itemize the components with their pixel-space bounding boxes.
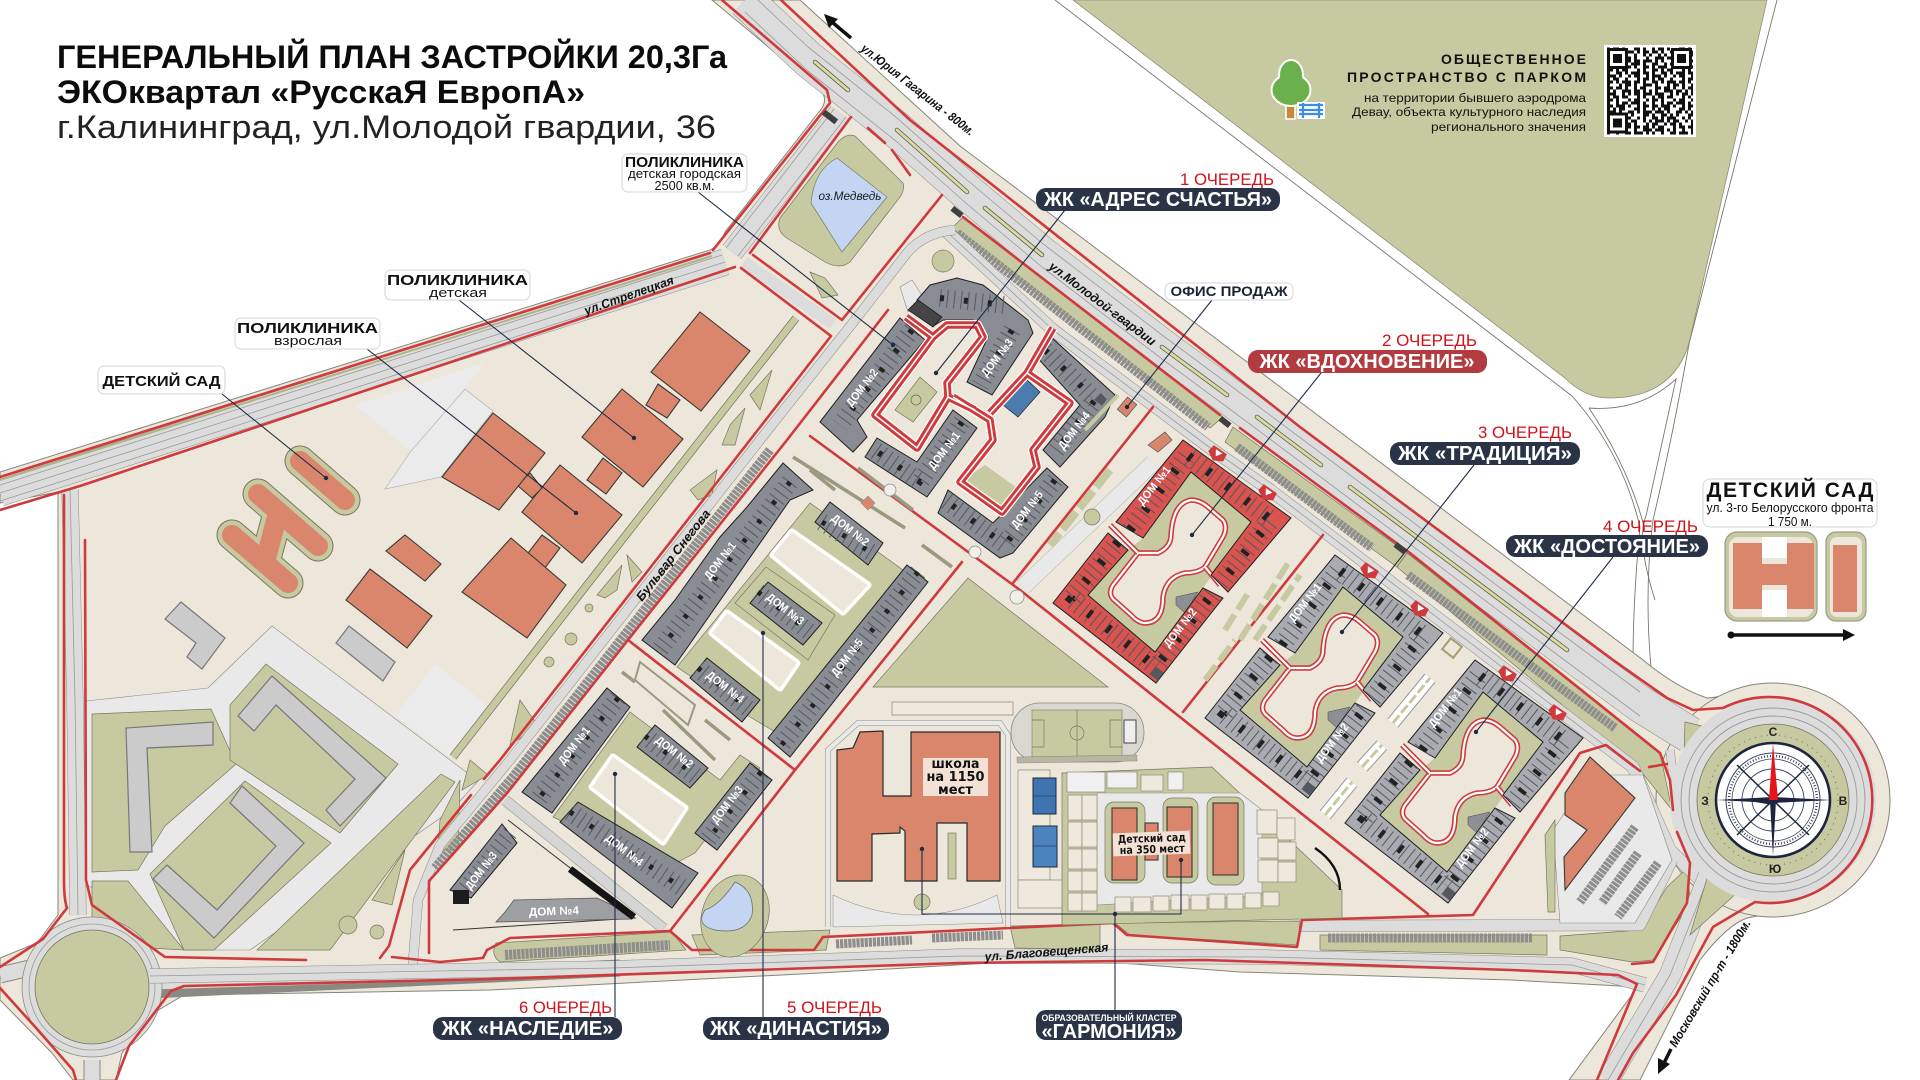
west north-south road — [70, 490, 78, 915]
panel: quarter 4 Dostoyanie: ДОМ №2 — [1454, 826, 1492, 870]
panel: quarter 5 Dinastiya: ДОМ №1 — [702, 540, 739, 582]
panel: quarter 1 Adres Schastya: ДОМ №1 — [926, 430, 963, 472]
text block: public space — [1347, 51, 1586, 134]
callout: queue 2 Vdokhnovenie — [1248, 331, 1487, 373]
kindergarten label: ул. 3-го Белорусского фронта — [1706, 500, 1874, 515]
lake name: оз.Медведь — [818, 191, 882, 203]
callout: queue 3 Traditsiya: ЖК «ТРАДИЦИЯ» — [1397, 443, 1572, 465]
olive central triangle — [873, 578, 1108, 687]
panel: quarter 6 Nasledie: ДОМ №4 — [603, 832, 645, 869]
panel: quarter 3 Traditsiya: ДОМ №2 — [1314, 721, 1352, 765]
panel: quarter 4 Dostoyanie — [1345, 660, 1583, 903]
arrow: to Gagarina — [824, 14, 851, 38]
callout: queue 6 Nasledie: ЖК «НАСЛЕДИЕ» — [440, 1018, 614, 1040]
panel: school — [828, 702, 1013, 927]
west lot orange buildings — [165, 312, 750, 681]
panel: stadium — [1011, 703, 1144, 908]
callout: Garmoniya cluster: «ГАРМОНИЯ» — [1042, 1021, 1176, 1043]
street: Gagarina: ул.Юрия Гагарина - 800м. — [857, 41, 977, 139]
leader lines — [222, 192, 1613, 1017]
callout: queue 5 Dinastiya: ЖК «ДИНАСТИЯ» — [709, 1018, 882, 1040]
left roundabout — [0, 917, 620, 1080]
label: sales office: ОФИС ПРОДАЖ — [1170, 283, 1288, 299]
roundabout with compass — [1670, 697, 1876, 903]
label: city children clinic: 2500 кв.м. — [654, 179, 714, 193]
school label: школа — [932, 757, 980, 772]
west residential green block — [86, 626, 478, 950]
panel: quarter 5 Dinastiya: ДОМ №4 — [704, 669, 746, 706]
school building — [837, 731, 1000, 881]
callout: queue 5 Dinastiya — [703, 998, 889, 1040]
panel: quarter 1 Adres Schastya — [820, 250, 1115, 558]
panel: quarter 6 Nasledie: ДОМ №2 — [653, 734, 695, 771]
street: Molodoy Gvardii: ул.Молодой-гвардии — [1045, 259, 1159, 349]
title: г.Калининград, ул.Молодой гвардии, 36 — [57, 109, 716, 145]
title: ГЕНЕРАЛЬНЫЙ ПЛАН ЗАСТРОЙКИ 20,3Га — [57, 39, 727, 75]
street: Blagoveshchenskaya: ул. Благовещенская — [983, 940, 1109, 964]
school label: мест — [938, 783, 973, 798]
callout: Garmoniya cluster — [1036, 1010, 1182, 1043]
panel: lower triangle houses: ДОМ №4 — [529, 905, 580, 919]
panel: kindergarten east — [1703, 478, 1877, 641]
kindergarten label: на 350 мест — [1120, 842, 1185, 857]
blue parking — [1003, 378, 1040, 417]
callout: queue 4 Dostoyanie: ЖК «ДОСТОЯНИЕ» — [1513, 536, 1700, 558]
callout: queue 2 Vdokhnovenie: 2 ОЧЕРЕДЬ — [1382, 331, 1477, 350]
panel: quarter 5 Dinastiya: ДОМ №3 — [764, 591, 806, 628]
callout: queue 4 Dostoyanie: 4 ОЧЕРЕДЬ — [1603, 517, 1698, 536]
green and parking on blagoveshchenskaya — [494, 860, 1672, 962]
label: adult clinic: ПОЛИКЛИНИКА — [237, 320, 378, 337]
callout: queue 2 Vdokhnovenie: ЖК «ВДОХНОВЕНИЕ» — [1258, 351, 1474, 373]
callout: queue 1 Adres Schastya: ЖК «АДРЕС СЧАСТЬЯ» — [1043, 189, 1272, 211]
panel: quarter 5 Dinastiya: ДОМ №5 — [829, 637, 866, 679]
panel: quarter 1 Adres Schastya: ДОМ №2 — [844, 367, 881, 409]
callout: queue 1 Adres Schastya: 1 ОЧЕРЕДЬ — [1180, 170, 1274, 189]
callout: queue 4 Dostoyanie — [1506, 517, 1708, 558]
roundabout with compass: З — [1701, 794, 1709, 808]
panel: quarter 6 Nasledie: ДОМ №3 — [709, 784, 746, 826]
street: Strelets: ул.Стрелецкая — [581, 273, 676, 318]
panel: shopping building and parking — [1545, 757, 1672, 923]
strip along boulevard and small gardens — [339, 318, 796, 939]
panel: quarter 1 Adres Schastya: ДОМ №3 — [979, 337, 1016, 379]
moscow prospect road — [1608, 722, 1738, 1080]
gates on roads — [822, 110, 1407, 554]
callout: queue 1 Adres Schastya — [1036, 170, 1280, 211]
panel: quarter 4 Dostoyanie: ДОМ №1 — [1427, 686, 1465, 730]
sports courts — [1033, 778, 1056, 814]
west kindergarten — [232, 461, 345, 583]
arrow: to Moscow prospect — [1658, 1049, 1671, 1074]
lot grids — [1067, 772, 1296, 912]
label: city children clinic: ПОЛИКЛИНИКА — [625, 154, 744, 171]
panel: quarter 1 Adres Schastya: ДОМ №4 — [1056, 410, 1093, 452]
callout: queue 3 Traditsiya: 3 ОЧЕРЕДЬ — [1478, 423, 1572, 442]
title: ЭКОквартал «РусскаЯ ЕвропА» — [57, 74, 585, 110]
label: city children clinic — [622, 154, 747, 193]
school label — [923, 757, 988, 798]
icon: compass rose — [1716, 743, 1831, 857]
street: Moscow prospect: Московский пр-т - 1800м. — [1667, 917, 1754, 1050]
road connector to Gagarina — [726, 109, 846, 324]
median strips — [815, 62, 1567, 650]
label: kindergarten west: ДЕТСКИЙ САД — [102, 372, 221, 390]
blagoveshchenskaya road — [150, 956, 1645, 985]
road molodoy gvardii — [745, 0, 1690, 735]
text block: public space: на территории бывшего аэродрома — [1364, 91, 1586, 105]
callout: Garmoniya cluster: ОБРАЗОВАТЕЛЬНЫЙ КЛАСТЕР — [1042, 1012, 1176, 1023]
panel: lower triangle houses — [450, 820, 635, 930]
school label: на 1150 — [926, 770, 984, 785]
sales office and garden between quarters — [793, 395, 1300, 680]
service road — [855, 230, 1700, 880]
callout: queue 6 Nasledie — [433, 998, 622, 1040]
panel: quarter 2 Vdokhnovenie: ДОМ №1 — [1136, 464, 1174, 508]
callout: queue 6 Nasledie: 6 ОЧЕРЕДЬ — [519, 998, 612, 1017]
panel: quarter 2 Vdokhnovenie — [1053, 440, 1291, 683]
park roads thin lines — [1055, 0, 1777, 687]
bulvar snegova road — [412, 320, 855, 975]
oz. Medved park — [779, 135, 904, 298]
panel: quarter 5 Dinastiya — [642, 463, 928, 757]
text block: public space: регионального значения — [1431, 120, 1586, 134]
kindergarten label — [1703, 478, 1877, 529]
roundabout with compass: Ю — [1769, 862, 1781, 876]
label: adult clinic: взрослая — [274, 334, 342, 348]
panel: quarter 2 Vdokhnovenie: ДОМ №2 — [1162, 606, 1200, 650]
roundabout with compass: В — [1839, 794, 1848, 808]
park area — [1073, 0, 1767, 398]
label: children clinic: ПОЛИКЛИНИКА — [387, 272, 528, 289]
lower right greenery — [1560, 867, 1690, 962]
kindergarten label: 1 750 м. — [1768, 514, 1812, 529]
title — [57, 39, 727, 145]
panel: education cluster kindergarten — [1062, 767, 1342, 925]
label: city children clinic: детская городская — [628, 167, 741, 181]
kindergarten buildings — [1725, 532, 1866, 621]
icon: tree and bench — [1272, 60, 1325, 119]
label: children clinic — [385, 270, 530, 300]
panel: quarter 3 Traditsiya — [1205, 555, 1443, 798]
callout: queue 5 Dinastiya: 5 ОЧЕРЕДЬ — [787, 998, 882, 1017]
green strips with parking along molodoy gvardii — [952, 217, 1672, 810]
grey existing buildings — [126, 722, 213, 852]
panel: quarter 3 Traditsiya: ДОМ №1 — [1287, 581, 1325, 625]
red pedestrian ring — [875, 317, 1070, 512]
label: adult clinic — [235, 318, 380, 349]
small pond — [690, 865, 780, 967]
text block: public space: ПРОСТРАНСТВО С ПАРКОМ — [1347, 69, 1586, 85]
lake — [811, 158, 887, 252]
street: Snegova: Бульвар Снегова — [633, 507, 713, 604]
panel: quarter 6 Nasledie: ДОМ №1 — [556, 725, 593, 767]
panel: quarter 6 Nasledie — [522, 662, 772, 908]
street names — [581, 41, 1754, 1050]
QR code — [1604, 45, 1696, 137]
text block: public space: ОБЩЕСТВЕННОЕ — [1441, 51, 1586, 67]
panel: quarter 1 Adres Schastya: ДОМ №5 — [1009, 489, 1046, 531]
label: kindergarten west — [98, 366, 225, 394]
road strelets — [0, 255, 728, 501]
flower beds between quarters 3 and 4 — [1325, 638, 1462, 815]
kindergarten label — [1113, 831, 1190, 857]
buildings — [820, 318, 925, 452]
text block: public space: Девау, объекта культурного наследия — [1352, 105, 1586, 119]
west lot pale grounds — [355, 363, 493, 757]
courtyard — [875, 325, 983, 448]
panel: quarter 5 Dinastiya: ДОМ №2 — [829, 512, 871, 549]
panel: lower triangle houses: ДОМ №3 — [463, 850, 500, 892]
label: children clinic: детская — [429, 286, 487, 300]
kindergarten label: Детский сад — [1118, 831, 1186, 846]
callout: queue 3 Traditsiya — [1390, 423, 1580, 465]
kindergarten label: ДЕТСКИЙ САД — [1706, 478, 1874, 502]
roundabout with compass: С — [1769, 725, 1778, 739]
arrow: scale — [1728, 629, 1855, 641]
